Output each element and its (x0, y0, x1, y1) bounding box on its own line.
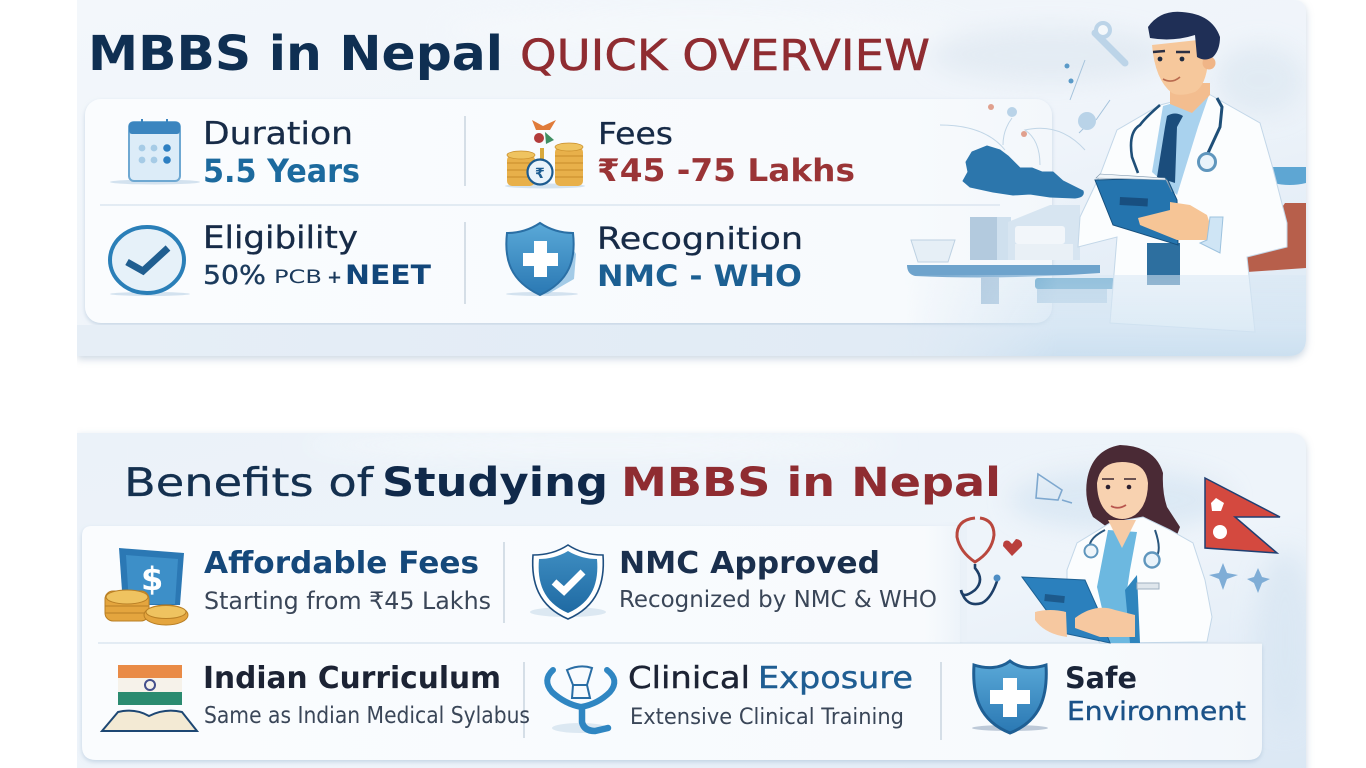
item: recognition (506, 222, 803, 296)
icon: check shield (530, 545, 606, 619)
heading: MBBS in Nepal (621, 460, 1001, 506)
doctor stethoscope (1090, 530, 1159, 557)
item: clinical exposure (547, 661, 913, 733)
item: duration (110, 116, 360, 190)
label: clinical exposure: Exposure (758, 661, 913, 696)
label: Indian curriculum: Indian Curriculum (203, 661, 501, 696)
label: fees: Fees (598, 117, 673, 152)
panel: quick overview (77, 0, 1306, 360)
icon: coins with rupee: ₹ (535, 166, 545, 182)
illustration: male doctor (1078, 12, 1287, 332)
illustration: desk and room (907, 167, 1306, 304)
description: recognized: Recognized by NMC & WHO (619, 587, 937, 613)
doctor hair (1086, 445, 1180, 535)
label: affordable fees: Affordable Fees (204, 546, 479, 581)
label: environment: Environment (1067, 697, 1246, 727)
heading: Benefits of (124, 461, 375, 506)
icon: calendar (110, 119, 200, 184)
doctor book and hand (1095, 178, 1178, 245)
item: fees (505, 117, 855, 189)
icon: plus shield (506, 223, 578, 296)
background: mist (1014, 470, 1306, 674)
label: safe: Safe (1065, 661, 1137, 695)
label: NMC approved: NMC Approved (619, 546, 880, 581)
value: eligibility: NEET (345, 260, 432, 291)
icon: decorative arrows (1036, 474, 1072, 503)
icon: Nepal flag (1205, 478, 1280, 553)
background: misty mountains (944, 32, 1300, 110)
illustration: female doctor (1022, 445, 1212, 643)
doctor face (1097, 462, 1148, 519)
value: eligibility: PCB (274, 266, 322, 288)
icon: sparkles (1209, 563, 1270, 593)
icon: Nepal map (940, 23, 1125, 198)
label: clinical exposure (628, 661, 913, 696)
description: starting fees: Starting from ₹45 Lakhs (204, 587, 491, 615)
item: safe environment (972, 661, 1246, 733)
value: eligibility: + (327, 267, 342, 288)
value: NMC WHO: NMC - WHO (597, 259, 802, 293)
description: same syllabus: Same as Indian Medical Sylabus (204, 703, 530, 729)
icon: stethoscope (547, 666, 614, 733)
benefits card (82, 522, 1262, 760)
label: clinical exposure: Clinical (628, 661, 750, 696)
panel: benefits (77, 433, 1315, 768)
heading (124, 460, 1001, 506)
value: fees range: ₹45 -75 Lakhs (597, 153, 855, 189)
bottom mist overlay (928, 275, 1306, 356)
label: eligibility: Eligibility (203, 220, 358, 256)
description: clinical training: Extensive Clinical Training (630, 705, 904, 730)
icon: stethoscope and heart (957, 518, 1022, 604)
item: Indian curriculum (102, 661, 530, 731)
icon: Indian flag and book (102, 665, 197, 731)
item: affordable fees (105, 546, 491, 625)
title (88, 26, 930, 82)
value: 5.5 years: 5.5 Years (203, 152, 360, 190)
label: recognition: Recognition (597, 222, 803, 257)
doctor coat (1067, 517, 1212, 643)
doctor coat (1078, 93, 1287, 332)
value: eligibility (203, 260, 432, 291)
icon: dollar card and coins: $ (141, 560, 163, 598)
doctor book and hands (1022, 577, 1110, 643)
item: NMC approved (530, 545, 937, 619)
icon: plus shield (972, 661, 1048, 733)
icon: dollar card and coins (105, 548, 188, 625)
doctor stethoscope (1131, 105, 1160, 173)
title: MBBS in Nepal (88, 26, 503, 82)
overview info card (85, 99, 1052, 323)
heading: Studying (382, 460, 608, 506)
doctor head (1170, 83, 1210, 113)
value: eligibility: 50% (203, 261, 266, 291)
item: eligibility (110, 220, 432, 296)
icon: coins with rupee (505, 120, 585, 188)
label: duration: Duration (203, 116, 353, 152)
icon: check circle (110, 227, 190, 296)
title: QUICK OVERVIEW (520, 31, 930, 81)
